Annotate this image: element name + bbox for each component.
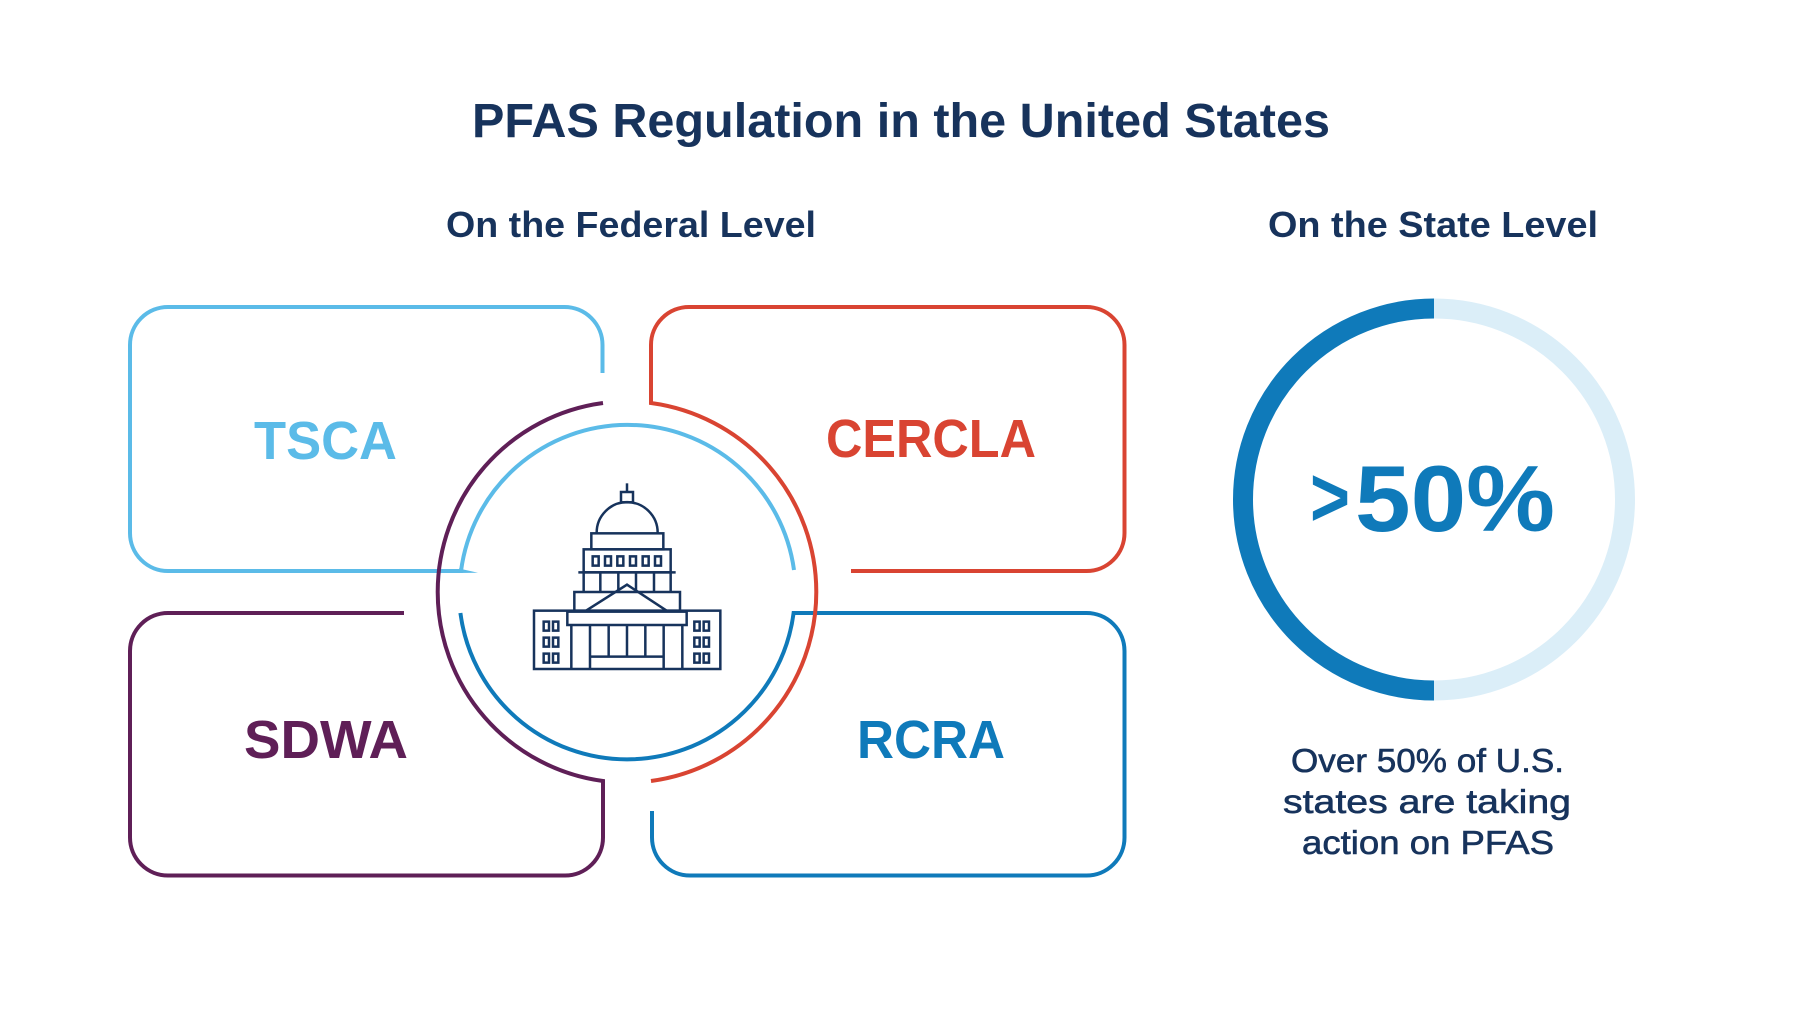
text block: state action caption bbox=[1283, 742, 1571, 861]
stat: greater than 50 percent: 50% bbox=[1355, 446, 1555, 551]
chart: state progress ring bbox=[1243, 308, 1625, 690]
label: RCRA: RCRA bbox=[857, 710, 1005, 770]
panel: SDWA box bbox=[130, 403, 603, 876]
stat: greater than 50 percent: > bbox=[1310, 450, 1350, 544]
text block: state action caption: states are taking bbox=[1283, 783, 1571, 820]
icon: capitol building bbox=[534, 483, 720, 669]
title: PFAS Regulation in the United States bbox=[472, 95, 1330, 148]
panel: RCRA box bbox=[460, 613, 1124, 876]
label: CERCLA: CERCLA bbox=[826, 409, 1036, 469]
panel: TSCA box bbox=[130, 307, 794, 573]
text block: state action caption: action on PFAS bbox=[1302, 824, 1554, 861]
panel: federal level diagram bbox=[130, 307, 1124, 876]
text block: state action caption: Over 50% of U.S. bbox=[1291, 742, 1564, 779]
label: TSCA: TSCA bbox=[254, 411, 397, 471]
label: SDWA: SDWA bbox=[244, 710, 408, 770]
heading: state level: On the State Level bbox=[1268, 204, 1598, 245]
heading: federal level: On the Federal Level bbox=[446, 204, 816, 245]
panel: CERCLA box bbox=[651, 307, 1124, 781]
